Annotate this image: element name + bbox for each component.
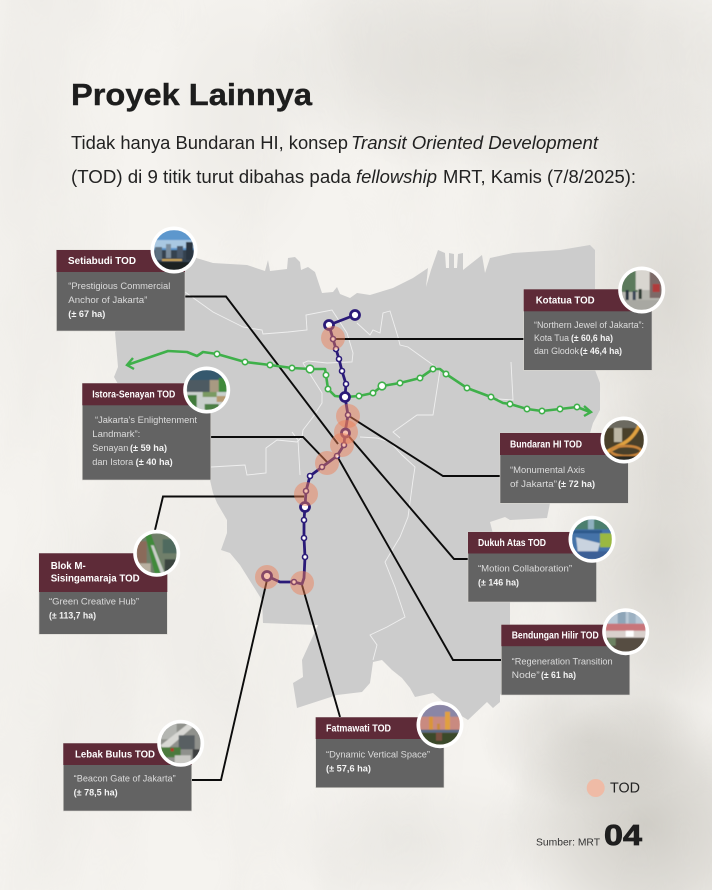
panel: Lebak Bulus TOD: (± 78,5 ha) xyxy=(74,788,118,798)
panel: Lebak Bulus TOD: “Beacon Gate of Jakarta” xyxy=(74,774,176,784)
panel: Lebak Bulus TOD: Lebak Bulus TOD xyxy=(75,749,155,760)
map of Jakarta xyxy=(114,245,600,720)
panel: Bendungan Hilir TOD xyxy=(501,608,649,695)
panel: Bundaran HI TOD xyxy=(500,416,648,503)
green LRT line xyxy=(127,351,591,416)
icon: Bundaran HI photo xyxy=(600,416,648,464)
icon: Kotatua photo xyxy=(618,266,665,314)
panel: Bendungan Hilir TOD: Bendungan Hilir TOD xyxy=(512,631,599,642)
panel: Setiabudi TOD: Setiabudi TOD xyxy=(68,256,136,267)
icon: Lebak Bulus photo xyxy=(157,720,204,767)
panel: Bundaran HI TOD: of Jakarta” xyxy=(510,479,557,489)
icon: Bendungan Hilir photo xyxy=(602,608,649,655)
panel: Kotatua TOD: (± 60,6 ha) xyxy=(571,333,613,343)
source note: Sumber: MRT xyxy=(536,836,601,848)
panel: Kotatua TOD: dan Glodok xyxy=(534,346,580,356)
panel: Bendungan Hilir TOD: “Regeneration Transition xyxy=(512,656,613,666)
panel: Setiabudi TOD: (± 67 ha) xyxy=(68,309,105,319)
panel: Blok M-Sisingamaraja TOD: Sisingamaraja TOD xyxy=(51,573,140,584)
intro text: MRT, Kamis (7/8/2025): xyxy=(443,167,636,187)
intro text: (TOD) di 9 titik turut dibahas pada xyxy=(71,167,352,187)
icon: Fatmawati photo xyxy=(416,701,464,748)
intro text xyxy=(71,133,636,187)
panel: Blok M-Sisingamaraja TOD: Blok M- xyxy=(51,561,86,572)
panel: Bendungan Hilir TOD: Node” xyxy=(512,670,540,680)
panel: Istora-Senayan TOD: (± 59 ha) xyxy=(130,443,167,453)
panel: Bendungan Hilir TOD: (± 61 ha) xyxy=(541,670,576,680)
panel: Istora-Senayan TOD: dan Istora xyxy=(92,457,133,467)
panel: Fatmawati TOD xyxy=(316,701,464,788)
panel: Blok M-Sisingamaraja TOD: “Green Creative Hub” xyxy=(49,597,139,607)
intro text: Tidak hanya Bundaran HI, konsep xyxy=(71,133,348,153)
panel: Istora-Senayan TOD: “Jakarta’s Enlightenment xyxy=(95,415,198,425)
panel: Blok M-Sisingamaraja TOD xyxy=(39,530,180,634)
connector lines xyxy=(155,296,524,780)
TOD highlight circles xyxy=(255,326,360,595)
panel: Blok M-Sisingamaraja TOD: (± 113,7 ha) xyxy=(49,611,96,621)
panel: Istora-Senayan TOD: Istora-Senayan TOD xyxy=(92,390,175,401)
icon: Setiabudi photo xyxy=(150,226,198,274)
panel: Fatmawati TOD: “Dynamic Vertical Space” xyxy=(326,750,430,760)
panel: Setiabudi TOD: Anchor of Jakarta” xyxy=(68,295,147,305)
panel: Kotatua TOD: (± 46,4 ha) xyxy=(580,346,622,356)
panel: Dukuh Atas TOD: (± 146 ha) xyxy=(478,578,519,588)
panel: Kotatua TOD: Kotatua TOD xyxy=(536,296,595,307)
MRT line with stations xyxy=(262,310,360,584)
intro text: Transit Oriented Development xyxy=(351,133,599,153)
panel: Istora-Senayan TOD: (± 40 ha) xyxy=(136,457,173,467)
panel: Kotatua TOD: “Northern Jewel of Jakarta”: xyxy=(534,320,644,330)
panel: Dukuh Atas TOD: “Motion Collaboration” xyxy=(478,564,572,574)
panel: Dukuh Atas TOD xyxy=(468,516,616,602)
district boundaries xyxy=(185,292,513,660)
panel: Setiabudi TOD xyxy=(56,226,198,331)
page number: 04 xyxy=(604,820,642,852)
panel: Setiabudi TOD: “Prestigious Commercial xyxy=(68,281,170,291)
panel: Bundaran HI TOD: Bundaran HI TOD xyxy=(510,439,582,450)
panel: Kotatua TOD: Kota Tua xyxy=(534,333,569,343)
legend: TOD xyxy=(587,779,640,797)
panel: Lebak Bulus TOD xyxy=(63,720,204,811)
panel: Bundaran HI TOD: “Monumental Axis xyxy=(510,465,586,475)
icon: Blok M photo xyxy=(133,530,180,577)
panel: Istora-Senayan TOD xyxy=(82,366,230,480)
panel: Fatmawati TOD: Fatmawati TOD xyxy=(326,724,391,735)
panel: Dukuh Atas TOD: Dukuh Atas TOD xyxy=(478,538,546,549)
panel: Istora-Senayan TOD: Senayan xyxy=(92,443,128,453)
panel: Bundaran HI TOD: (± 72 ha) xyxy=(558,479,595,489)
panel: Kotatua TOD xyxy=(524,266,665,370)
icon: Istora-Senayan photo xyxy=(183,366,230,414)
intro text: fellowship xyxy=(356,167,437,187)
panel: Fatmawati TOD: (± 57,6 ha) xyxy=(326,764,371,774)
panel: Istora-Senayan TOD: Landmark”: xyxy=(92,429,140,439)
title: Proyek Lainnya xyxy=(71,77,313,112)
legend: TOD: TOD xyxy=(610,780,640,796)
icon: Dukuh Atas photo xyxy=(568,516,616,563)
